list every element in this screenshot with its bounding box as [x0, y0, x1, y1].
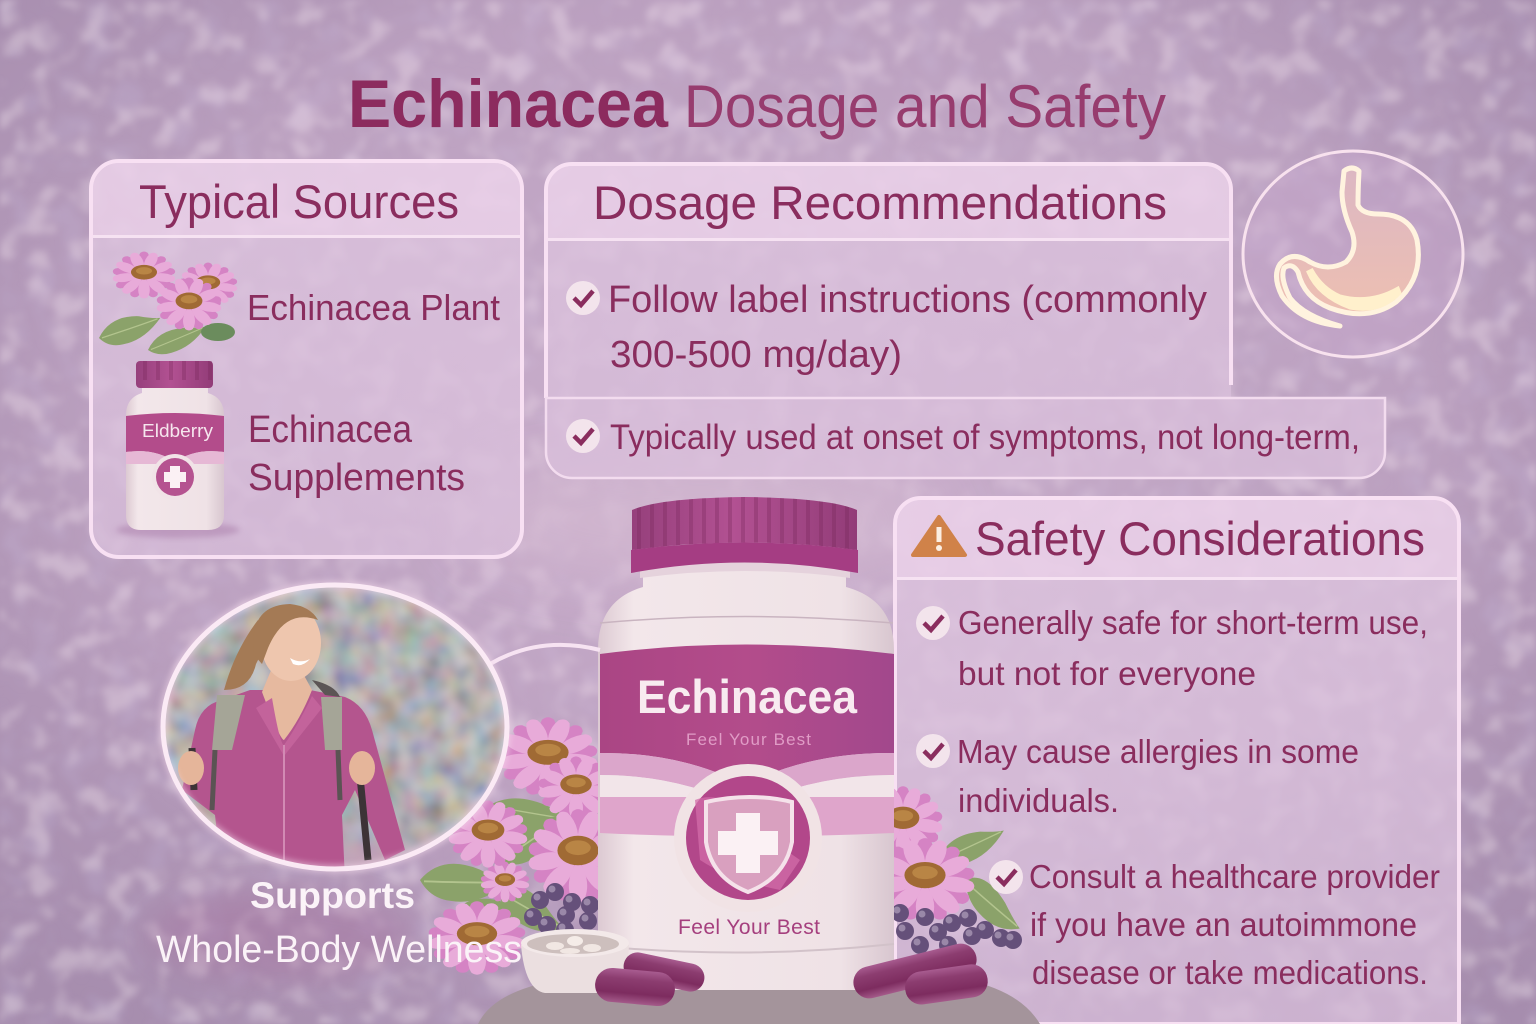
icon: small supplement bottle: Eldberry	[142, 421, 213, 441]
illustration: capsules right	[850, 940, 990, 1007]
illustration: flowers and berries right of bottle	[863, 786, 1024, 954]
title: Dosage and Safety	[684, 73, 1166, 140]
icon: check	[566, 419, 600, 453]
text: generally safe	[958, 604, 1428, 692]
icon: stomach in glowing circle	[1243, 151, 1463, 357]
title: Echinacea	[348, 66, 669, 142]
illustration: bowl of tablets	[521, 929, 629, 993]
text: follow label instructions: Follow label instructions (commonly	[608, 279, 1207, 321]
label: echinacea supplements: Supplements	[248, 457, 465, 499]
panel: dosage recommendations	[546, 164, 1385, 478]
panel: safety considerations	[895, 498, 1459, 1024]
illustration: woman hiker in circle	[156, 579, 600, 876]
text: follow label instructions	[608, 279, 1207, 376]
text: generally safe: but not for everyone	[958, 655, 1256, 692]
bottle bottom tagline: Feel Your Best	[678, 916, 820, 939]
icon: check	[566, 281, 600, 315]
bottle cap	[631, 497, 858, 573]
caption line 2: Whole-Body Wellness	[156, 929, 522, 971]
icon: warning triangle	[913, 517, 965, 555]
icon: echinacea flowers	[97, 251, 238, 362]
text: consult provider: Consult a healthcare provider	[1029, 858, 1440, 895]
bottle tagline: Feel Your Best	[686, 730, 811, 749]
text: consult provider: if you have an autoimmone	[1030, 906, 1417, 943]
bottle label	[600, 644, 894, 912]
text: generally safe: Generally safe for short-term use,	[958, 604, 1428, 641]
text: consult provider	[1029, 858, 1440, 991]
icon: check	[989, 860, 1023, 894]
icon: check	[916, 606, 950, 640]
caption line 1: Supports	[250, 875, 415, 916]
bottle name: Echinacea	[637, 670, 858, 723]
text: allergies: individuals.	[958, 782, 1119, 819]
heading: safety considerations: Safety Considerations	[975, 512, 1425, 565]
text: allergies: May cause allergies in some	[957, 733, 1359, 770]
text: follow label instructions: 300-500 mg/day)	[610, 334, 902, 376]
label: echinacea plant: Echinacea Plant	[247, 287, 500, 328]
text: consult provider: disease or take medications.	[1032, 954, 1428, 991]
label: echinacea supplements: Echinacea	[248, 409, 413, 451]
label: echinacea supplements	[248, 409, 465, 499]
panel: typical sources	[91, 161, 522, 557]
text: typically used: Typically used at onset of symptoms, not long-term,	[610, 418, 1360, 457]
title	[348, 66, 1166, 142]
safety considerations content	[913, 512, 1440, 991]
illustration: flowers and berries left of bottle	[420, 717, 629, 975]
icon: small supplement bottle	[116, 361, 240, 538]
heading: dosage recommendations: Dosage Recommendations	[593, 176, 1167, 229]
illustration: large echinacea bottle	[598, 497, 894, 990]
caption: supports whole-body wellness	[150, 875, 522, 980]
stone ground	[478, 974, 1040, 1024]
icon: check	[916, 734, 950, 768]
text: allergies	[957, 733, 1359, 819]
heading: typical sources: Typical Sources	[139, 175, 459, 228]
illustration: capsules left	[594, 950, 707, 1007]
